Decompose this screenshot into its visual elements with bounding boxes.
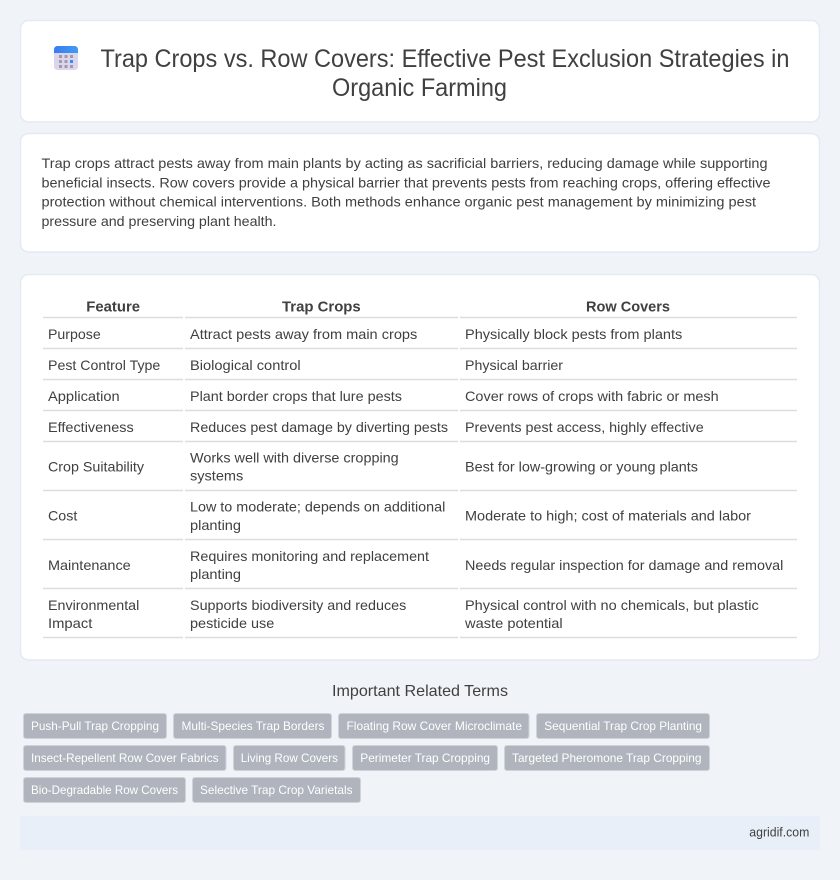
table header: Trap Crops <box>282 299 361 316</box>
table row: pest control type <box>48 357 563 373</box>
table row: environmental impact: waste potential <box>464 615 563 631</box>
text block: introduction <box>42 155 771 229</box>
text block: introduction: beneficial insects. Row covers provide a physical barrier that prevents pests from reaching crops, offering effective <box>42 174 771 190</box>
table row: effectiveness <box>48 419 704 435</box>
panel: related term tags: Bio-Degradable Row Covers <box>31 783 178 797</box>
panel: related term tags: Floating Row Cover Microclimate <box>346 719 522 733</box>
table row: maintenance: Maintenance <box>48 557 131 573</box>
table row: environmental impact: Environmental <box>48 597 139 613</box>
table row: pest control type: Biological control <box>190 357 301 373</box>
table header: Row Covers <box>586 299 670 316</box>
table row: cost: Cost <box>48 508 77 524</box>
table row: application: Application <box>48 388 120 404</box>
table row: effectiveness: Effectiveness <box>48 419 134 435</box>
table row: effectiveness: Reduces pest damage by diverting pests <box>190 419 448 435</box>
table row: maintenance <box>48 548 783 582</box>
table row: cost: planting <box>190 517 241 533</box>
table row: environmental impact: Supports biodiversity and reduces <box>190 597 406 613</box>
footer <box>20 816 820 850</box>
table row: purpose <box>48 326 682 342</box>
table row: maintenance: Needs regular inspection for damage and removal <box>465 557 783 573</box>
footer: agridif.com <box>749 826 809 840</box>
panel: related term tags: Selective Trap Crop Varietals <box>200 783 352 797</box>
panel: related term tags: Multi-Species Trap Borders <box>182 719 324 733</box>
table row: crop suitability: Works well with diverse cropping <box>190 450 399 466</box>
table row: environmental impact <box>48 597 759 631</box>
table row: application: Plant border crops that lure pests <box>190 388 402 404</box>
table row: environmental impact: Physical control with no chemicals, but plastic <box>465 597 759 613</box>
panel: related term tags: Targeted Pheromone Trap Cropping <box>512 751 702 765</box>
table row: environmental impact: Impact <box>48 615 92 631</box>
table row: application <box>48 388 719 404</box>
panel: related term tags: Perimeter Trap Cropping <box>360 751 490 765</box>
table row: cost: Moderate to high; cost of materials and labor <box>465 508 751 524</box>
text block: introduction: Trap crops attract pests away from main plants by acting as sacrificial barriers, reducing damage while supporting <box>42 155 768 171</box>
table row: pest control type: Physical barrier <box>465 357 563 373</box>
table row: application: Cover rows of crops with fabric or mesh <box>465 388 719 404</box>
panel: related term tags: Living Row Covers <box>241 751 338 765</box>
table header: Feature <box>86 299 140 316</box>
text block: introduction: protection without chemical interventions. Both methods enhance organic pest management by minimizing pest <box>42 194 756 210</box>
table row: pest control type: Pest Control Type <box>48 357 161 373</box>
table row: cost <box>48 499 751 533</box>
panel: related term tags <box>24 714 710 802</box>
panel: related term tags: Sequential Trap Crop Planting <box>544 719 702 733</box>
table row: purpose: Physically block pests from plants <box>465 326 682 342</box>
table row: cost: Low to moderate; depends on additional <box>190 499 445 515</box>
table row: crop suitability: Crop Suitability <box>48 459 144 475</box>
title: Trap Crops vs. Row Covers: Effective Pest Exclusion Strategies in <box>100 45 790 73</box>
table row: maintenance: Requires monitoring and replacement <box>190 548 429 564</box>
panel: related term tags: Push-Pull Trap Cropping <box>31 719 159 733</box>
table row: maintenance: planting <box>190 566 241 582</box>
panel: comparison table <box>20 274 820 660</box>
icon: calendar <box>54 46 78 70</box>
table row: crop suitability: systems <box>190 468 243 484</box>
panel: introduction <box>20 134 820 252</box>
title <box>100 45 790 102</box>
table row: purpose: Attract pests away from main crops <box>190 326 417 342</box>
table row: crop suitability: Best for low-growing or young plants <box>465 459 698 475</box>
table row: purpose: Purpose <box>48 326 101 342</box>
heading: important related terms: Important Related Terms <box>332 683 508 700</box>
table header <box>86 299 670 316</box>
table row: crop suitability <box>48 450 698 484</box>
title: Organic Farming <box>332 74 507 102</box>
table row: environmental impact: pesticide use <box>190 615 275 631</box>
text block: introduction: pressure and preserving plant health. <box>42 213 276 229</box>
panel: title card <box>20 20 820 122</box>
table row: effectiveness: Prevents pest access, highly effective <box>465 419 704 435</box>
panel: related term tags: Insect-Repellent Row Cover Fabrics <box>31 751 218 765</box>
